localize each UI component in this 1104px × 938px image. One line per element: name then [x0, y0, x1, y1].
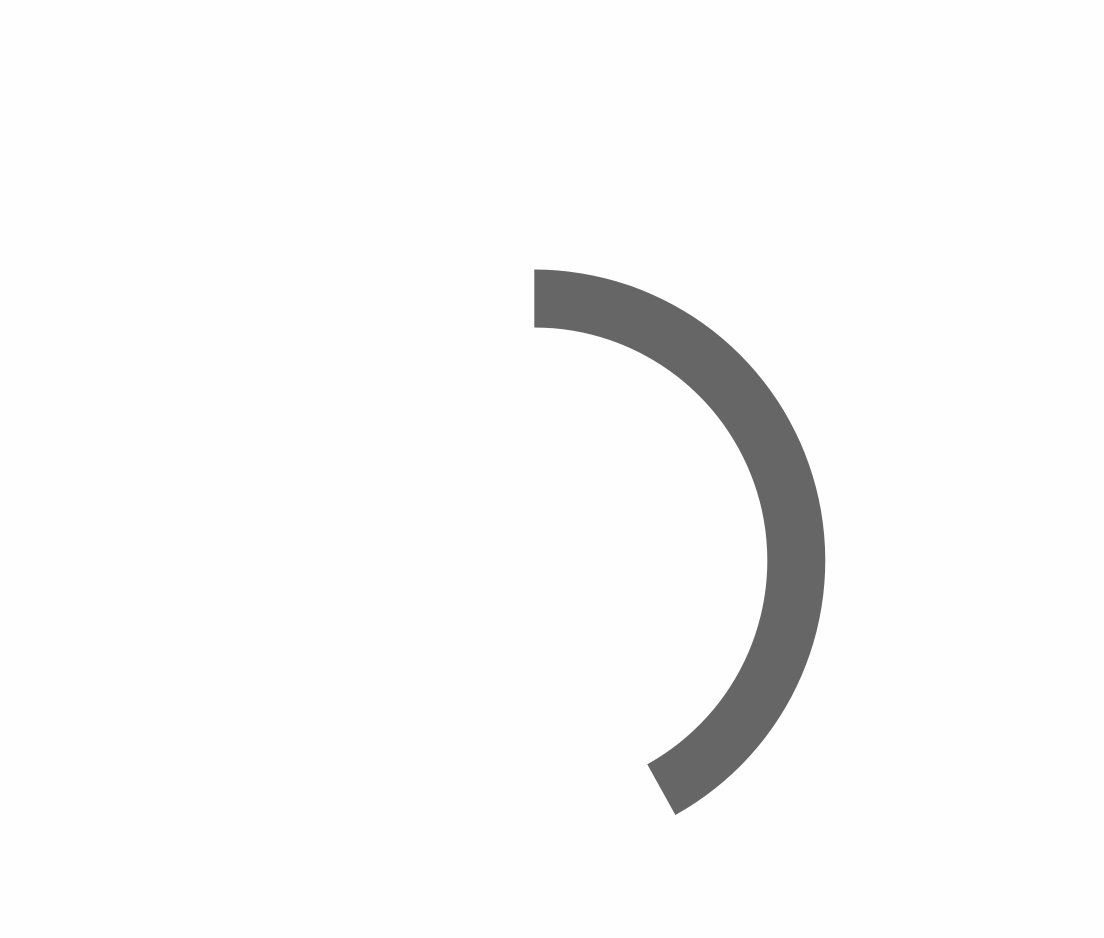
arc segment [534, 270, 825, 815]
